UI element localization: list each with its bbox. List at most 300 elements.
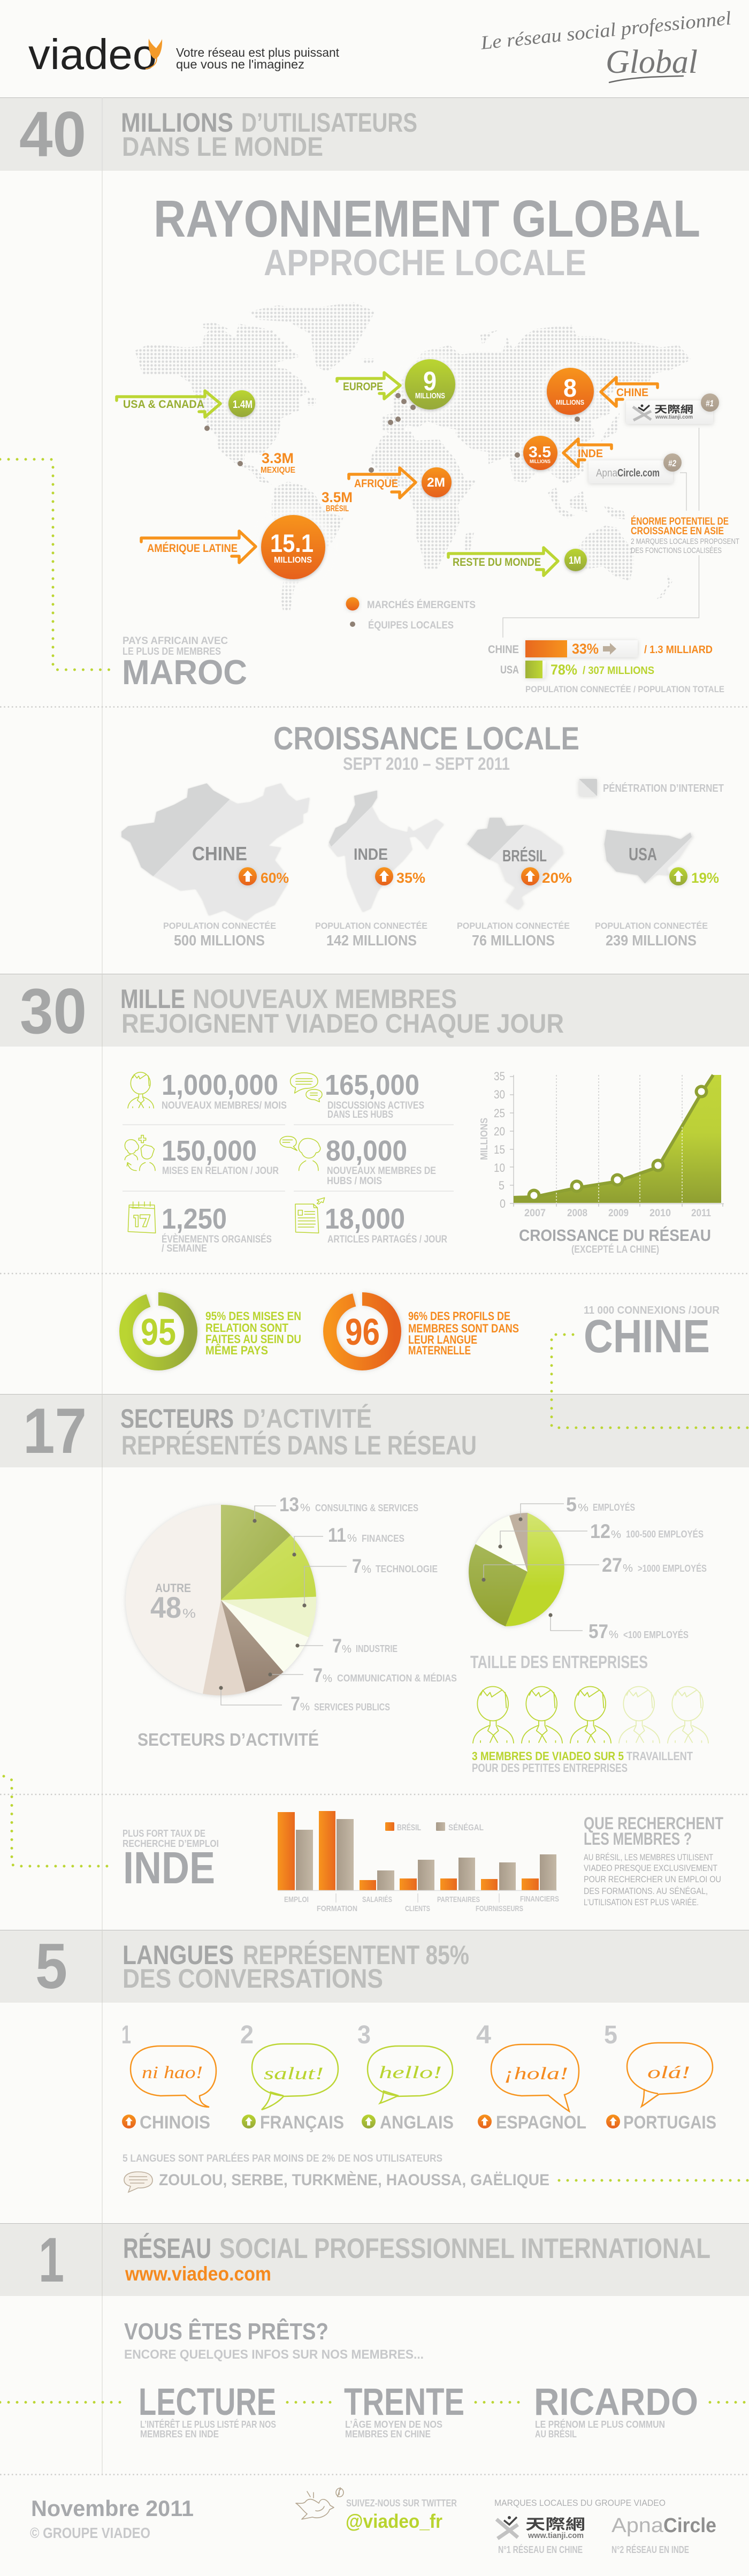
- heading: croissance locale: CROISSANCE LOCALE: [273, 721, 579, 756]
- twitter call to action: [346, 2498, 457, 2532]
- fact: Chine: CHINE: [584, 1310, 710, 1362]
- language 2: français: 2: [240, 2021, 254, 2049]
- sector labels: %: [342, 1643, 351, 1655]
- stat: articles shared: [295, 1198, 447, 1245]
- y axis labels: 20: [494, 1125, 505, 1138]
- region: China: MILLIONS: [556, 399, 584, 406]
- band: 17 secteurs: [0, 1394, 749, 1467]
- y axis labels: 15: [494, 1143, 505, 1156]
- y axis labels: 35: [494, 1070, 505, 1083]
- sector labels: %: [362, 1564, 371, 1575]
- band heading: NOUVEAUX MEMBRES: [193, 984, 457, 1014]
- date and copyright: © GROUPE VIADEO: [30, 2525, 150, 2541]
- donut: 96 percent: MEMBRES SONT DANS: [408, 1322, 519, 1335]
- connected population bars: CHINE: [488, 643, 519, 656]
- band heading: REPRÉSENTÉS DANS LE RÉSEAU: [121, 1430, 477, 1460]
- callout: Asia potential: DES FONCTIONS LOCALISÉES: [631, 546, 722, 555]
- band heading: [123, 1940, 469, 1994]
- region: Latin America: [141, 515, 325, 579]
- donut: 96 percent: LEUR LANGUE: [408, 1333, 477, 1346]
- brand card: Tianji: www.tianji.com: [655, 414, 693, 420]
- title: rayonnement global: APPROCHE LOCALE: [264, 242, 586, 283]
- stat: new hub members: [280, 1135, 436, 1187]
- language 4: espagnol: ¡hola!: [504, 2064, 568, 2083]
- connected population bars: 78%: [551, 662, 577, 678]
- chart: network growth: 2010: [649, 1208, 671, 1219]
- brand card: ApnaCircle: Apna: [596, 467, 618, 479]
- region: USA and Canada: USA & CANADA: [123, 398, 204, 411]
- size labels: >1000 EMPLOYÉS: [638, 1563, 707, 1574]
- date and copyright: [30, 2496, 194, 2541]
- region: India: 3.5: [529, 444, 551, 461]
- region: Africa: AFRIQUE: [354, 478, 398, 490]
- dotted connector: languages: [559, 2179, 749, 2182]
- label: Brésil: 3.5M: [322, 489, 353, 505]
- website link: www.viadeo.com: [125, 2263, 271, 2285]
- band: 5 langues: [0, 1930, 749, 2003]
- handwritten slogan: [479, 7, 732, 82]
- chart: network growth: 2008: [567, 1208, 587, 1219]
- label: Mexique: MEXIQUE: [261, 466, 295, 475]
- dotted connector: Chine: [552, 1335, 749, 1428]
- language 4: espagnol: 4: [476, 2021, 491, 2049]
- language 1: chinois: CHINOIS: [140, 2112, 210, 2133]
- sector labels: FINANCES: [362, 1533, 404, 1544]
- size labels: %: [609, 1629, 618, 1641]
- stat: new members per month: 1,000,000: [162, 1069, 278, 1101]
- connected population bars: USA: [500, 664, 519, 676]
- sector labels: 13: [279, 1494, 299, 1516]
- fact: Maroc: PAYS AFRICAIN AVEC: [123, 635, 228, 647]
- region: Europe: [337, 359, 455, 410]
- country: USA: USA: [629, 844, 657, 864]
- text block: what members look for: POUR RECHERCHER UN EMPLOI OU: [584, 1874, 721, 1884]
- language 5: portugais: 5: [604, 2021, 617, 2049]
- fact: ricardo: [534, 2381, 698, 2439]
- donut: 96 percent: [330, 1299, 519, 1364]
- text block: minor languages: [123, 2153, 549, 2192]
- stat: new hub members: NOUVEAUX MEMBRES DE: [327, 1165, 436, 1177]
- brand card: Tianji: 天際網: [654, 404, 693, 415]
- icon: document: [295, 1198, 325, 1233]
- callout: Asia potential: ÉNORME POTENTIEL DE: [631, 516, 729, 527]
- stat: events per week: [128, 1202, 272, 1254]
- text block: minor languages: ZOULOU, SERBE, TURKMÈNE, HAOUSSA, GAËLIQUE: [159, 2171, 549, 2189]
- language 5: portugais: PORTUGAIS: [623, 2112, 716, 2133]
- band: 40 millions: [0, 97, 749, 171]
- size labels: 12: [590, 1520, 610, 1542]
- text block: what members look for: LES MEMBRES ?: [584, 1829, 692, 1848]
- local brands: [494, 2498, 716, 2555]
- stat: new hub members: 80,000: [326, 1135, 407, 1167]
- language 3: anglais: 3: [357, 2021, 371, 2049]
- language 2: français: [240, 2021, 344, 2133]
- size labels: %: [623, 1563, 633, 1574]
- heading: vous êtes prêts: ENCORE QUELQUES INFOS SUR NOS MEMBRES...: [124, 2347, 424, 2362]
- twitter call to action: SUIVEZ-NOUS SUR TWITTER: [346, 2498, 457, 2509]
- text block: what members look for: VIADEO PRESQUE EXCLUSIVEMENT: [584, 1863, 717, 1873]
- country: India: 35%: [396, 870, 425, 886]
- region: Europe: EUROPE: [343, 381, 383, 393]
- category labels: PARTENAIRES: [437, 1895, 480, 1904]
- language 4: espagnol: [476, 2021, 586, 2133]
- bar chart: member goals: [278, 1811, 559, 1913]
- twitter call to action: @viadeo_fr: [346, 2510, 442, 2532]
- sector labels: %: [300, 1701, 310, 1713]
- stat: active discussions: DISCUSSIONS ACTIVES: [327, 1100, 424, 1111]
- chart: network growth: 2009: [608, 1208, 629, 1219]
- stat: active discussions: 165,000: [325, 1069, 419, 1101]
- icon: two people connecting: [125, 1135, 155, 1171]
- left vertical rule: [102, 97, 103, 2474]
- fact: trente: TRENTE: [344, 2381, 464, 2423]
- chart: network growth: 2011: [691, 1208, 711, 1219]
- fact: Inde: RECHERCHE D’EMPLOI: [123, 1838, 219, 1849]
- category labels: FINANCIERS: [520, 1895, 559, 1904]
- language 3: anglais: hello!: [379, 2063, 442, 2082]
- size labels: [566, 1494, 707, 1642]
- fact: trente: MEMBRES EN CHINE: [345, 2429, 431, 2439]
- logo: Tianji: www.tianji.com: [528, 2531, 584, 2540]
- region: USA and Canada: 1.4M: [233, 399, 253, 411]
- chart: network growth: CROISSANCE DU RÉSEAU: [519, 1226, 711, 1245]
- country: Brazil: [457, 818, 572, 949]
- connected population bars: / 307 MILLIONS: [583, 665, 654, 677]
- fact: Inde: INDE: [123, 1843, 215, 1893]
- region: Europe: MILLIONS: [415, 391, 445, 400]
- chart: network growth: 2007: [524, 1208, 546, 1219]
- stat: connections per day: 150,000: [162, 1135, 257, 1167]
- heading: vous êtes prêts: [124, 2318, 424, 2362]
- band number: 1: [39, 2225, 64, 2295]
- stat: events per week: 1,250: [162, 1203, 227, 1235]
- connected population bars: 33%: [572, 641, 599, 657]
- size labels: 57: [588, 1620, 608, 1642]
- size labels: <100 EMPLOYÉS: [623, 1629, 689, 1640]
- sector labels: %: [347, 1533, 357, 1544]
- y axis labels: 5: [499, 1179, 505, 1192]
- chart: network growth: (EXCEPTÉ LA CHINE): [571, 1244, 659, 1255]
- logo: Tianji: [496, 2516, 585, 2540]
- pictogram: 3 of 5 members: POUR DES PETITES ENTREPRISES: [472, 1761, 628, 1775]
- donut: 95 percent: MÊME PAYS: [205, 1344, 268, 1357]
- region: rest of the world: RESTE DU MONDE: [453, 556, 541, 569]
- region: India: INDE: [578, 448, 603, 460]
- dotted connector: Inde: [4, 1776, 110, 1866]
- logo: ApnaCircle: Circle: [663, 2514, 716, 2537]
- heading: vous êtes prêts: VOUS ÊTES PRÊTS?: [124, 2318, 328, 2345]
- category labels: CLIENTS: [405, 1904, 430, 1913]
- sector labels: CONSULTING & SERVICES: [315, 1503, 418, 1513]
- fact: lecture: LECTURE: [139, 2381, 276, 2423]
- band heading: REJOIGNENT VIADEO CHAQUE JOUR: [121, 1009, 564, 1039]
- sector labels: 11: [328, 1524, 346, 1546]
- size labels: EMPLOYÉS: [593, 1502, 635, 1513]
- fact: ricardo: AU BRÉSIL: [535, 2428, 577, 2439]
- band heading: [120, 1404, 477, 1460]
- country: Brazil: 76 MILLIONS: [472, 932, 555, 949]
- handwritten slogan: Le réseau social professionnel: [479, 7, 732, 54]
- country: India: POPULATION CONNECTÉE: [315, 921, 427, 931]
- tagline: que vous ne l'imaginez: [176, 57, 304, 71]
- category labels: FOURNISSEURS: [476, 1904, 523, 1913]
- label: Mexique: [261, 450, 295, 475]
- pie chart: sectors: [126, 1494, 457, 1749]
- footer: [30, 2488, 716, 2555]
- stat: new hub members: HUBS / MOIS: [327, 1176, 382, 1187]
- fact: trente: L’ÂGE MOYEN DE NOS: [345, 2419, 442, 2430]
- size labels: 5: [566, 1494, 577, 1516]
- band heading: D’ACTIVITÉ: [243, 1404, 372, 1434]
- logo: ApnaCircle: Apna: [612, 2514, 664, 2537]
- country: USA: 19%: [691, 870, 719, 886]
- region: rest of the world: [448, 548, 587, 575]
- region: Latin America: MILLIONS: [274, 556, 312, 565]
- fact: Maroc: [122, 635, 247, 692]
- sector labels: TECHNOLOGIE: [376, 1564, 438, 1574]
- country: USA: [595, 830, 719, 949]
- fact: lecture: L’INTÉRÊT LE PLUS LISTÉ PAR NOS: [140, 2419, 276, 2430]
- country: China: [121, 783, 309, 949]
- region: India: MILLIONS: [530, 459, 551, 464]
- text block: what members look for: [584, 1814, 723, 1907]
- language 2: français: salut!: [264, 2064, 324, 2083]
- icon: twitter bird: [296, 2488, 343, 2519]
- callout: Asia potential: [503, 428, 739, 638]
- stat: connections per day: [125, 1135, 279, 1177]
- sector labels: COMMUNICATION & MÉDIAS: [337, 1672, 457, 1684]
- stat: active discussions: [291, 1069, 424, 1120]
- donut: 96 percent: MATERNELLE: [408, 1344, 471, 1357]
- label: Brésil: BRÉSIL: [326, 503, 349, 513]
- stat: events per week: / SEMAINE: [162, 1243, 207, 1254]
- connected population bars: POPULATION CONNECTÉE / POPULATION TOTALE: [525, 684, 724, 694]
- band heading: DES CONVERSATIONS: [123, 1964, 383, 1994]
- band number: 17: [23, 1395, 87, 1467]
- language 5: portugais: [604, 2021, 716, 2133]
- band heading: [120, 984, 564, 1039]
- band heading: MILLIONS: [121, 108, 233, 138]
- region: Latin America: 15.1: [270, 529, 314, 557]
- country: China: CHINE: [192, 843, 247, 865]
- label: Brésil: [322, 489, 353, 513]
- text block: what members look for: DES FORMATIONS. AU SÉNÉGAL,: [584, 1886, 708, 1896]
- region: China: CHINE: [616, 387, 648, 399]
- logo: Tianji: 天際網: [525, 2517, 585, 2533]
- language 1: chinois: 1: [121, 2021, 131, 2049]
- map legend: ÉQUIPES LOCALES: [368, 619, 454, 631]
- language 2: français: FRANÇAIS: [260, 2112, 344, 2133]
- stat: articles shared: ARTICLES PARTAGÉS / JOUR: [327, 1233, 447, 1245]
- region: rest of the world: 1M: [569, 555, 581, 566]
- legend: internet penetration: PÉNÉTRATION D’INTERNET: [603, 782, 724, 794]
- connected population bars: / 1.3 MILLIARD: [644, 644, 713, 656]
- fact: ricardo: LE PRÉNOM LE PLUS COMMUN: [535, 2419, 665, 2430]
- brand card: ApnaCircle: Circle.com: [617, 467, 660, 479]
- chart title: TAILLE DES ENTREPRISES: [470, 1652, 648, 1672]
- size labels: 27: [602, 1554, 622, 1576]
- language 4: espagnol: ESPAGNOL: [496, 2112, 586, 2133]
- country: USA: 239 MILLIONS: [606, 932, 697, 949]
- band number: 40: [19, 99, 86, 170]
- y axis labels: 10: [494, 1161, 505, 1175]
- chart title: SECTEURS D’ACTIVITÉ: [137, 1730, 319, 1749]
- sector labels: %: [323, 1673, 332, 1685]
- category labels: EMPLOI: [284, 1895, 309, 1904]
- y axis labels: 30: [494, 1088, 505, 1101]
- callout: Asia potential: CROISSANCE EN ASIE: [631, 526, 724, 537]
- logo: viadeo: viadeo: [28, 31, 157, 78]
- band heading: [121, 108, 417, 162]
- icon: member with speech bubble: [280, 1137, 320, 1171]
- local brands: N°1 RÉSEAU EN CHINE: [498, 2544, 583, 2555]
- stat: events per week: ÉVÈNEMENTS ORGANISÉS: [162, 1233, 272, 1245]
- country: India: [315, 791, 444, 949]
- icon: calendar: [128, 1202, 156, 1233]
- fact: Maroc: MAROC: [122, 653, 247, 692]
- connected population bars: [488, 640, 724, 694]
- sector labels: INDUSTRIE: [356, 1643, 398, 1654]
- band number: 30: [20, 975, 87, 1047]
- brand card: ApnaCircle: [588, 453, 682, 483]
- band heading: REPRÉSENTENT 85%: [243, 1940, 469, 1970]
- header: [28, 7, 732, 82]
- map halos: [225, 353, 599, 587]
- label: autre: AUTRE: [155, 1581, 191, 1595]
- fact: ricardo: RICARDO: [534, 2381, 698, 2423]
- country: Brazil: 20%: [542, 870, 572, 886]
- title: rayonnement global: [154, 190, 700, 283]
- donut: 96 percent: 96% DES PROFILS DE: [408, 1309, 510, 1323]
- legend: internet penetration: [579, 779, 724, 796]
- language 3: anglais: [357, 2021, 454, 2133]
- category labels: FORMATION: [317, 1904, 357, 1913]
- band number: 5: [35, 1930, 67, 2002]
- region: China: 8: [563, 374, 577, 402]
- country: Brazil: BRÉSIL: [502, 846, 547, 865]
- stat: new members per month: [128, 1069, 287, 1111]
- band: 1 réseau: [0, 2223, 749, 2296]
- heading: croissance locale: [273, 721, 579, 774]
- region: Latin America: AMÉRIQUE LATINE: [147, 542, 238, 555]
- fact: lecture: MEMBRES EN INDE: [140, 2429, 219, 2439]
- donut: 95 percent: RELATION SONT: [205, 1321, 288, 1335]
- band heading: RÉSEAU: [123, 2232, 211, 2264]
- world dot map: [135, 302, 690, 610]
- region: China: [547, 368, 658, 415]
- language 1: chinois: ni hao!: [142, 2063, 203, 2082]
- label: autre: 48: [150, 1590, 181, 1624]
- leaders: [219, 1506, 347, 1705]
- sector labels: 7: [352, 1555, 362, 1577]
- fact: Chine: 11 000 CONNEXIONS /JOUR: [584, 1305, 720, 1316]
- stat: articles shared: 18,000: [325, 1203, 405, 1235]
- band heading: D’UTILISATEURS: [241, 108, 417, 138]
- icon: speech bubble: [124, 2172, 152, 2192]
- leaders: [482, 1504, 599, 1631]
- tagline: Votre réseau est plus puissant: [176, 46, 340, 59]
- donut: 95 percent: 95% DES MISES EN: [205, 1309, 301, 1323]
- local brands: N°2 RÉSEAU EN INDE: [612, 2544, 689, 2555]
- label: autre: %: [182, 1607, 196, 1621]
- fact: lecture: [139, 2381, 276, 2439]
- country: China: POPULATION CONNECTÉE: [163, 921, 276, 931]
- tagline: [176, 46, 340, 71]
- country: China: 60%: [261, 870, 289, 886]
- date and copyright: Novembre 2011: [31, 2496, 194, 2521]
- dotted connectors: facts: [0, 2401, 749, 2404]
- logo: ApnaCircle: [612, 2514, 716, 2537]
- language 5: portugais: olá!: [647, 2063, 690, 2082]
- legend: SÉNÉGAL: [448, 1822, 484, 1832]
- stat: connections per day: MISES EN RELATION / JOUR: [162, 1165, 279, 1177]
- region: Africa: 2M: [427, 475, 445, 490]
- donut: 95 percent: 95: [141, 1311, 176, 1353]
- sector labels: 7: [313, 1664, 323, 1686]
- country: India: 142 MILLIONS: [326, 932, 417, 949]
- donut: 95 percent: [126, 1299, 301, 1364]
- country: USA: POPULATION CONNECTÉE: [595, 921, 708, 931]
- text block: what members look for: AU BRÉSIL, LES MEMBRES UTILISENT: [584, 1852, 713, 1862]
- pie chart: company size: [469, 1494, 707, 1672]
- sector labels: [279, 1494, 457, 1715]
- category labels: [284, 1893, 559, 1913]
- band heading: MILLE: [120, 984, 185, 1014]
- stat: active discussions: DANS LES HUBS: [327, 1109, 393, 1120]
- band heading: LANGUES: [123, 1940, 234, 1970]
- dotted connector: Maroc: [0, 459, 113, 670]
- donut: 96 percent: 96: [345, 1311, 380, 1353]
- map markers: local teams: [204, 393, 580, 473]
- local brands: MARQUES LOCALES DU GROUPE VIADEO: [494, 2498, 666, 2508]
- legend: [385, 1822, 484, 1832]
- brand card: Tianji: [626, 393, 719, 424]
- chart: network growth: [479, 1070, 724, 1255]
- pictogram: 3 of 5 members: [472, 1686, 708, 1775]
- category labels: SALARIÉS: [362, 1895, 392, 1904]
- language 3: anglais: ANGLAIS: [380, 2112, 454, 2133]
- country: Brazil: POPULATION CONNECTÉE: [457, 921, 570, 931]
- text block: what members look for: L’UTILISATION EST PLUS VARIÉE.: [584, 1897, 699, 1907]
- region: Africa: [349, 467, 452, 498]
- band: 30 mille: [0, 974, 749, 1047]
- size labels: %: [578, 1502, 588, 1514]
- size labels: 100-500 EMPLOYÉS: [626, 1528, 704, 1540]
- map legend: MARCHÉS ÉMERGENTS: [367, 599, 476, 611]
- region: India: [523, 436, 612, 470]
- donut: 95 percent: FAITES AU SEIN DU: [205, 1332, 301, 1346]
- label: autre: [150, 1581, 196, 1624]
- band heading: SECTEURS: [120, 1404, 234, 1434]
- region: USA and Canada: [117, 390, 255, 417]
- region: Europe: 9: [423, 366, 437, 396]
- fact: trente: [344, 2381, 464, 2439]
- y axis labels: 25: [494, 1107, 505, 1120]
- pictogram: 3 of 5 members: 3 MEMBRES DE VIADEO SUR 5: [472, 1749, 624, 1763]
- y axis labels: [494, 1070, 506, 1210]
- legend: BRÉSIL: [397, 1822, 421, 1832]
- heading: croissance locale: SEPT 2010 – SEPT 2011: [343, 754, 510, 774]
- icon: speech bubbles: [291, 1073, 322, 1102]
- icon: person: [128, 1072, 154, 1108]
- chart: network growth: MILLIONS: [479, 1118, 490, 1160]
- brand card: Tianji: #1: [706, 398, 714, 408]
- band heading: DANS LE MONDE: [122, 132, 323, 162]
- handwritten slogan: Global: [606, 44, 698, 80]
- country: India: INDE: [354, 845, 388, 863]
- country: China: 500 MILLIONS: [174, 932, 265, 949]
- size labels: %: [611, 1529, 621, 1541]
